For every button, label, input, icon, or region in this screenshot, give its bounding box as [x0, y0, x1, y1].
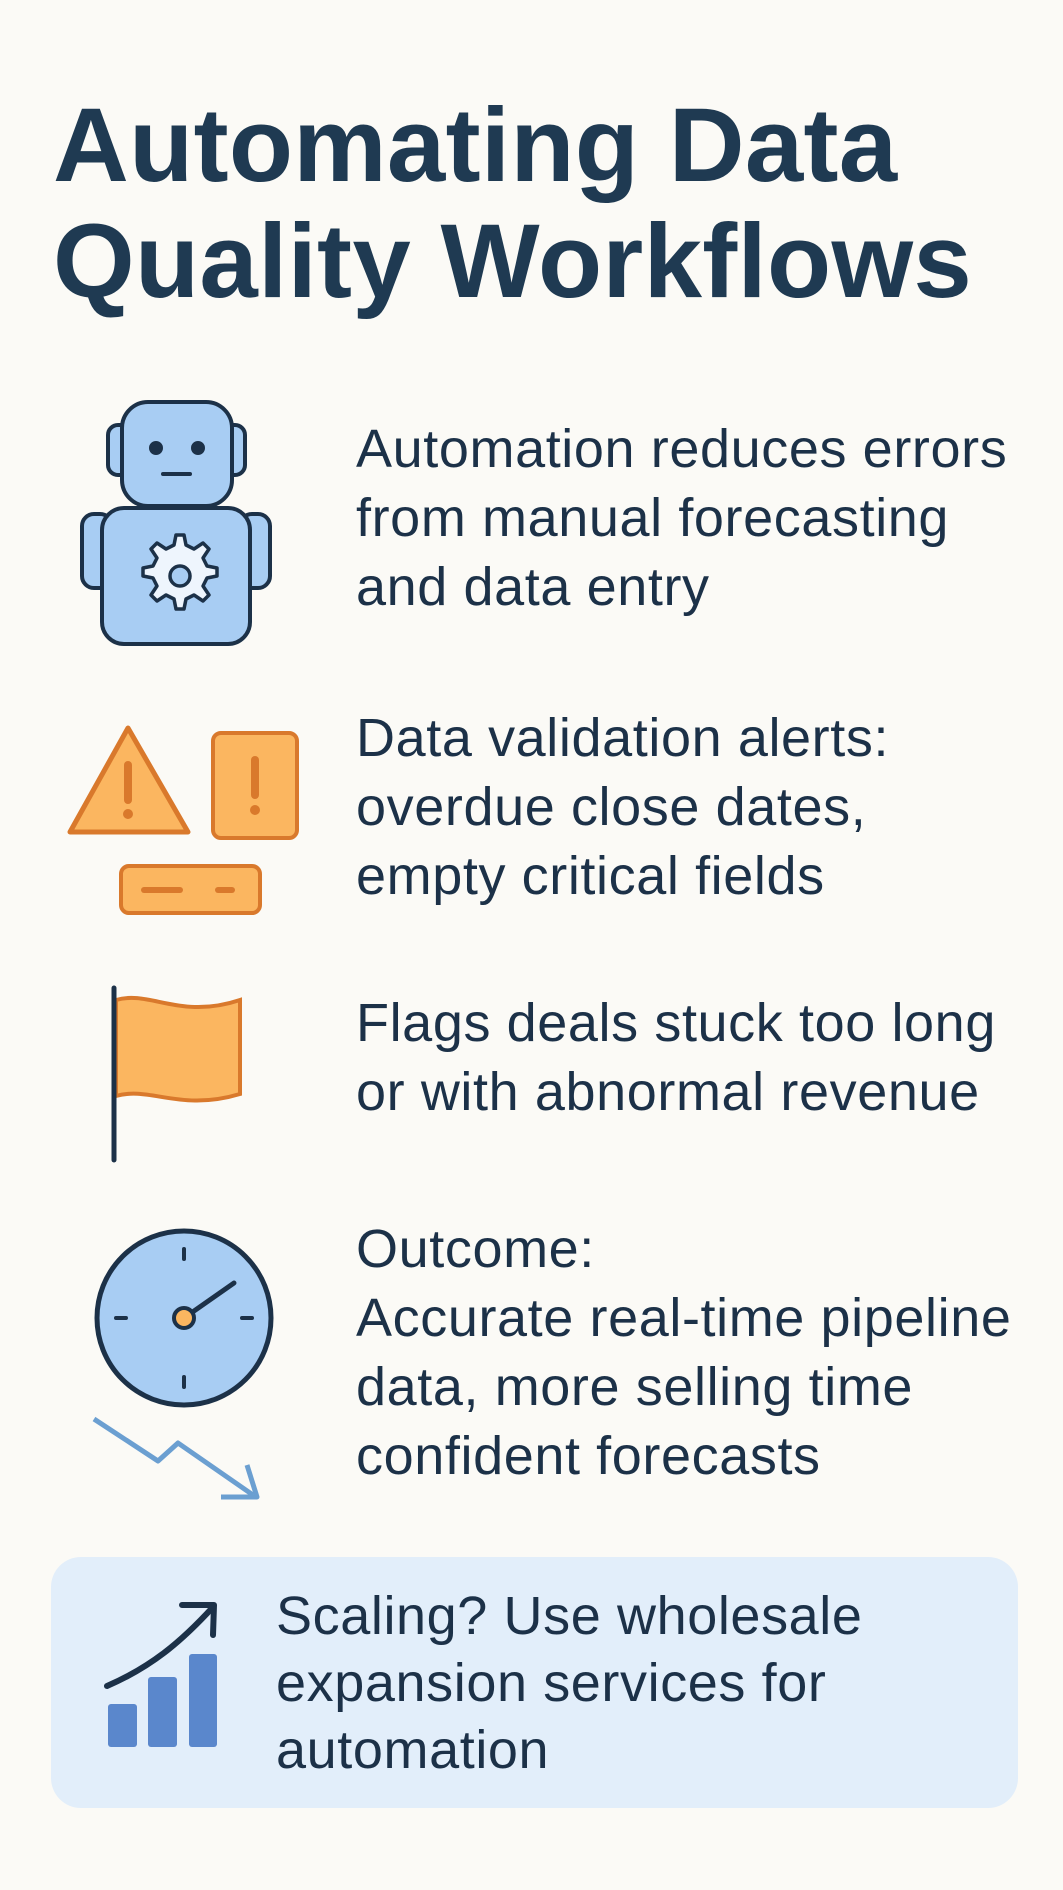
text: automation: Automation reduces errors [356, 419, 1007, 479]
text: outcome: Outcome: [356, 1219, 595, 1279]
text: automation [356, 419, 1007, 617]
text: scaling: expansion services for [276, 1653, 826, 1713]
icon: growth chart [104, 1602, 217, 1747]
callout: scaling box [51, 1557, 1018, 1808]
text: automation: from manual forecasting [356, 488, 949, 548]
text: outcome [356, 1219, 1012, 1486]
text: outcome: confident forecasts [356, 1426, 821, 1486]
text: automation: and data entry [356, 557, 710, 617]
icon: flag [112, 986, 242, 1162]
text: outcome: data, more selling time [356, 1357, 913, 1417]
text: flags [356, 993, 996, 1122]
text: validation alerts: overdue close dates, [356, 777, 866, 837]
title: Quality Workflows [53, 203, 972, 320]
text: validation alerts: Data validation alerts: [356, 708, 889, 768]
text: outcome: Accurate real-time pipeline [356, 1288, 1012, 1348]
text: flags: or with abnormal revenue [356, 1062, 980, 1122]
text: scaling: automation [276, 1720, 549, 1780]
icon: clock with down arrow [92, 1228, 274, 1500]
text: flags: Flags deals stuck too long [356, 993, 996, 1053]
title: Automating Data [53, 87, 898, 204]
title [53, 87, 972, 320]
text: scaling [276, 1586, 863, 1780]
text: scaling: Scaling? Use wholesale [276, 1586, 863, 1646]
text: validation alerts: empty critical fields [356, 846, 825, 906]
icon: robot [80, 400, 272, 646]
icon: alerts [68, 726, 299, 915]
text: validation alerts [356, 708, 889, 906]
